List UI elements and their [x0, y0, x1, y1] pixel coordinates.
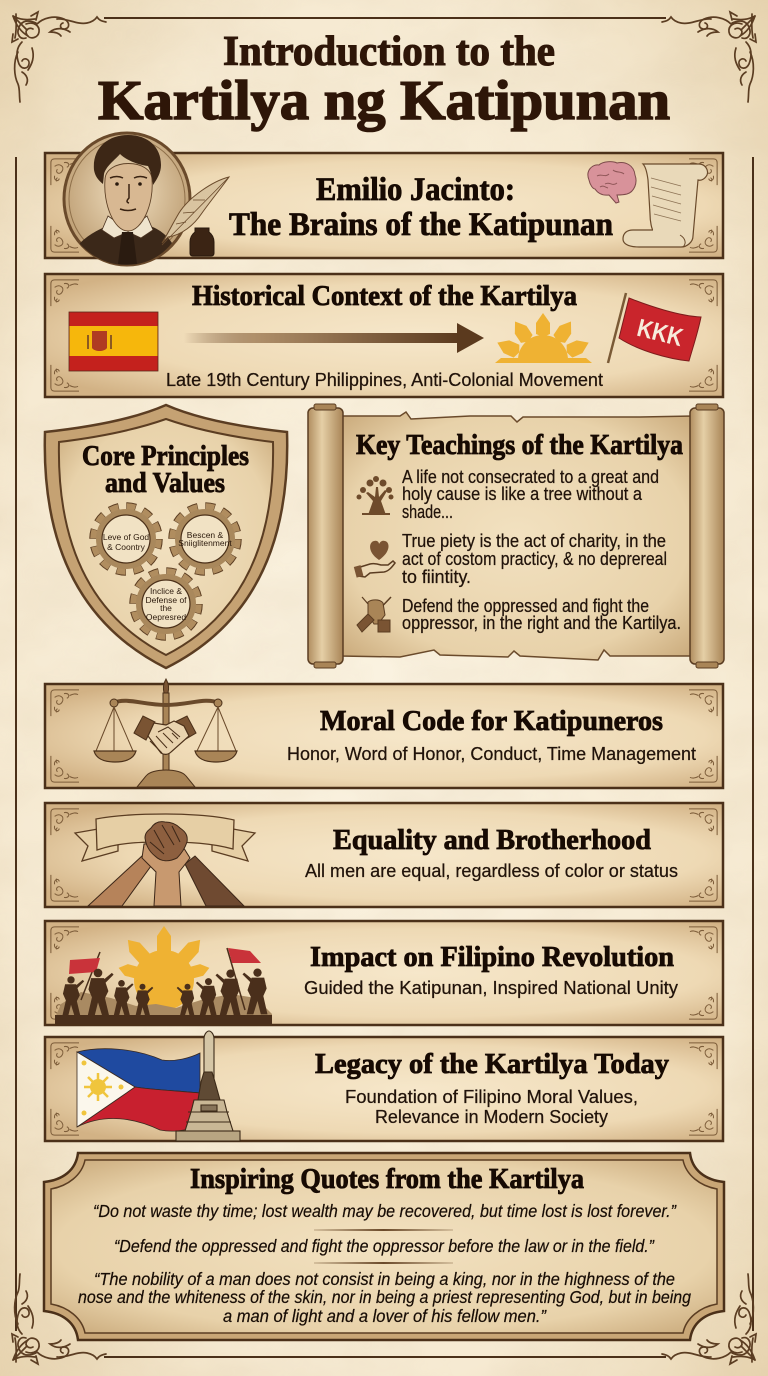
quote 3	[78, 1269, 691, 1326]
icon: paper scroll	[623, 164, 708, 247]
icon: ribbon banner	[75, 814, 255, 861]
teaching 2: to fiintity.	[402, 566, 471, 587]
heading: legacy: Legacy of the Kartilya Today	[315, 1048, 669, 1080]
heading: impact: Impact on Filipino Revolution	[310, 941, 674, 973]
subtext: legacy: Relevance in Modern Society	[375, 1106, 609, 1127]
subtext: legacy: Foundation of Filipino Moral Values,	[345, 1086, 638, 1107]
title: Introduction to the	[223, 29, 555, 75]
teaching 2: act of costom practicy, & no deprereal	[402, 548, 667, 569]
corner flourish bottom left	[12, 1274, 106, 1364]
panel: historical context	[45, 274, 723, 397]
gear: justice: Defense of	[145, 595, 187, 605]
icon: Philippine flag	[77, 1049, 200, 1131]
icon: Rizal monument	[176, 1031, 240, 1141]
teaching 1: A life not consecrated to a great and	[402, 466, 659, 487]
panel: legacy today	[45, 1031, 723, 1141]
panel: inspiring quotes	[44, 1153, 724, 1340]
teaching 2: True piety is the act of charity, in the	[402, 530, 666, 551]
heading: quotes: Inspiring Quotes from the Kartilya	[190, 1163, 584, 1195]
gear: justice: the	[160, 603, 172, 613]
gear: reason and enlightenment: Sniiglitenment	[178, 538, 232, 548]
heading: historical context: Historical Context of the Kartilya	[192, 281, 577, 312]
icon: tree	[356, 476, 394, 515]
heading: moral code: Moral Code for Katipuneros	[320, 705, 663, 737]
heading: core principles: and Values	[105, 468, 225, 499]
heading: key teachings: Key Teachings of the Kartilya	[356, 430, 683, 461]
teaching 1	[402, 466, 659, 522]
heading: core principles	[82, 441, 249, 499]
arrow: Spain to Katipunan	[184, 323, 484, 353]
icon: quill and inkwell	[162, 177, 229, 256]
subtext: impact: Guided the Katipunan, Inspired National Unity	[304, 977, 679, 998]
quote 3: a man of light and a lover of his fellow men.”	[223, 1306, 547, 1326]
panel: key teachings scroll	[308, 404, 724, 668]
corner flourish top right	[662, 12, 756, 102]
subtext: moral code: Honor, Word of Honor, Conduct, Time Management	[287, 743, 696, 764]
gear: justice	[134, 572, 198, 636]
icon: scales with handshake	[94, 679, 237, 787]
heading: Emilio Jacinto	[229, 172, 613, 243]
subtext: equality: All men are equal, regardless of color or status	[305, 860, 678, 881]
icon: Spanish flag	[69, 312, 158, 371]
scroll right roller	[690, 404, 724, 668]
teaching 2	[402, 530, 667, 587]
heading: core principles: Core Principles	[82, 441, 249, 472]
heading: equality: Equality and Brotherhood	[333, 824, 651, 856]
gear: love of God: Leve of God	[103, 532, 149, 542]
corner flourish bottom right	[662, 1274, 756, 1364]
panel: moral code	[45, 679, 723, 788]
heading: Emilio Jacinto: Emilio Jacinto:	[316, 172, 515, 208]
title: Kartilya ng Katipunan	[98, 70, 670, 132]
subtext: legacy	[345, 1086, 638, 1127]
scroll left roller	[308, 404, 343, 668]
caption: historical context: Late 19th Century Philippines, Anti-Colonial Movement	[166, 369, 603, 390]
gear: love of God	[94, 507, 158, 571]
icon: KKK flag	[608, 293, 701, 363]
title	[98, 29, 670, 132]
teaching 3: Defend the oppressed and fight the	[402, 595, 649, 616]
teaching 3	[402, 595, 681, 633]
gear: reason and enlightenment	[173, 507, 237, 571]
teaching 1: shade...	[402, 501, 453, 522]
icon: half sun	[494, 313, 592, 363]
teaching 3: oppressor, in the right and the Kartilya.	[402, 612, 681, 633]
panel: impact on revolution	[45, 921, 723, 1025]
quote 3: nose and the whiteness of the skin, nor in being a priest representing God, but in being	[78, 1287, 691, 1307]
heading: Emilio Jacinto: The Brains of the Katipunan	[229, 207, 613, 243]
gear: justice: Oepresred	[146, 612, 186, 622]
icon: revolution scene	[55, 926, 272, 1024]
gear: love of God: & Coontry	[107, 542, 146, 552]
icon: clasped hands	[88, 822, 244, 906]
teaching 1: holy cause is like a tree without a	[402, 483, 643, 504]
corner flourish top left	[12, 12, 106, 102]
quote 2: “Defend the oppressed and fight the oppressor before the law or in the field.”	[114, 1236, 655, 1256]
quote 1: “Do not waste thy time; lost wealth may be recovered, but time lost is lost forever.”	[93, 1201, 677, 1221]
panel: Emilio Jacinto	[45, 133, 723, 265]
icon: heart in hand	[354, 541, 395, 578]
gear: reason and enlightenment: Bescen &	[187, 530, 224, 540]
icon: KKK flag: KKK	[634, 314, 686, 352]
portrait of Emilio Jacinto	[64, 133, 190, 265]
icon: fist and sword	[357, 597, 391, 632]
panel: core principles shield	[45, 405, 287, 668]
icon: brain	[588, 162, 636, 203]
panel: equality and brotherhood	[45, 803, 723, 907]
quote 3: “The nobility of a man does not consist in being a king, nor in the highness of the	[94, 1269, 675, 1289]
gear: justice: Inclice &	[150, 586, 182, 596]
